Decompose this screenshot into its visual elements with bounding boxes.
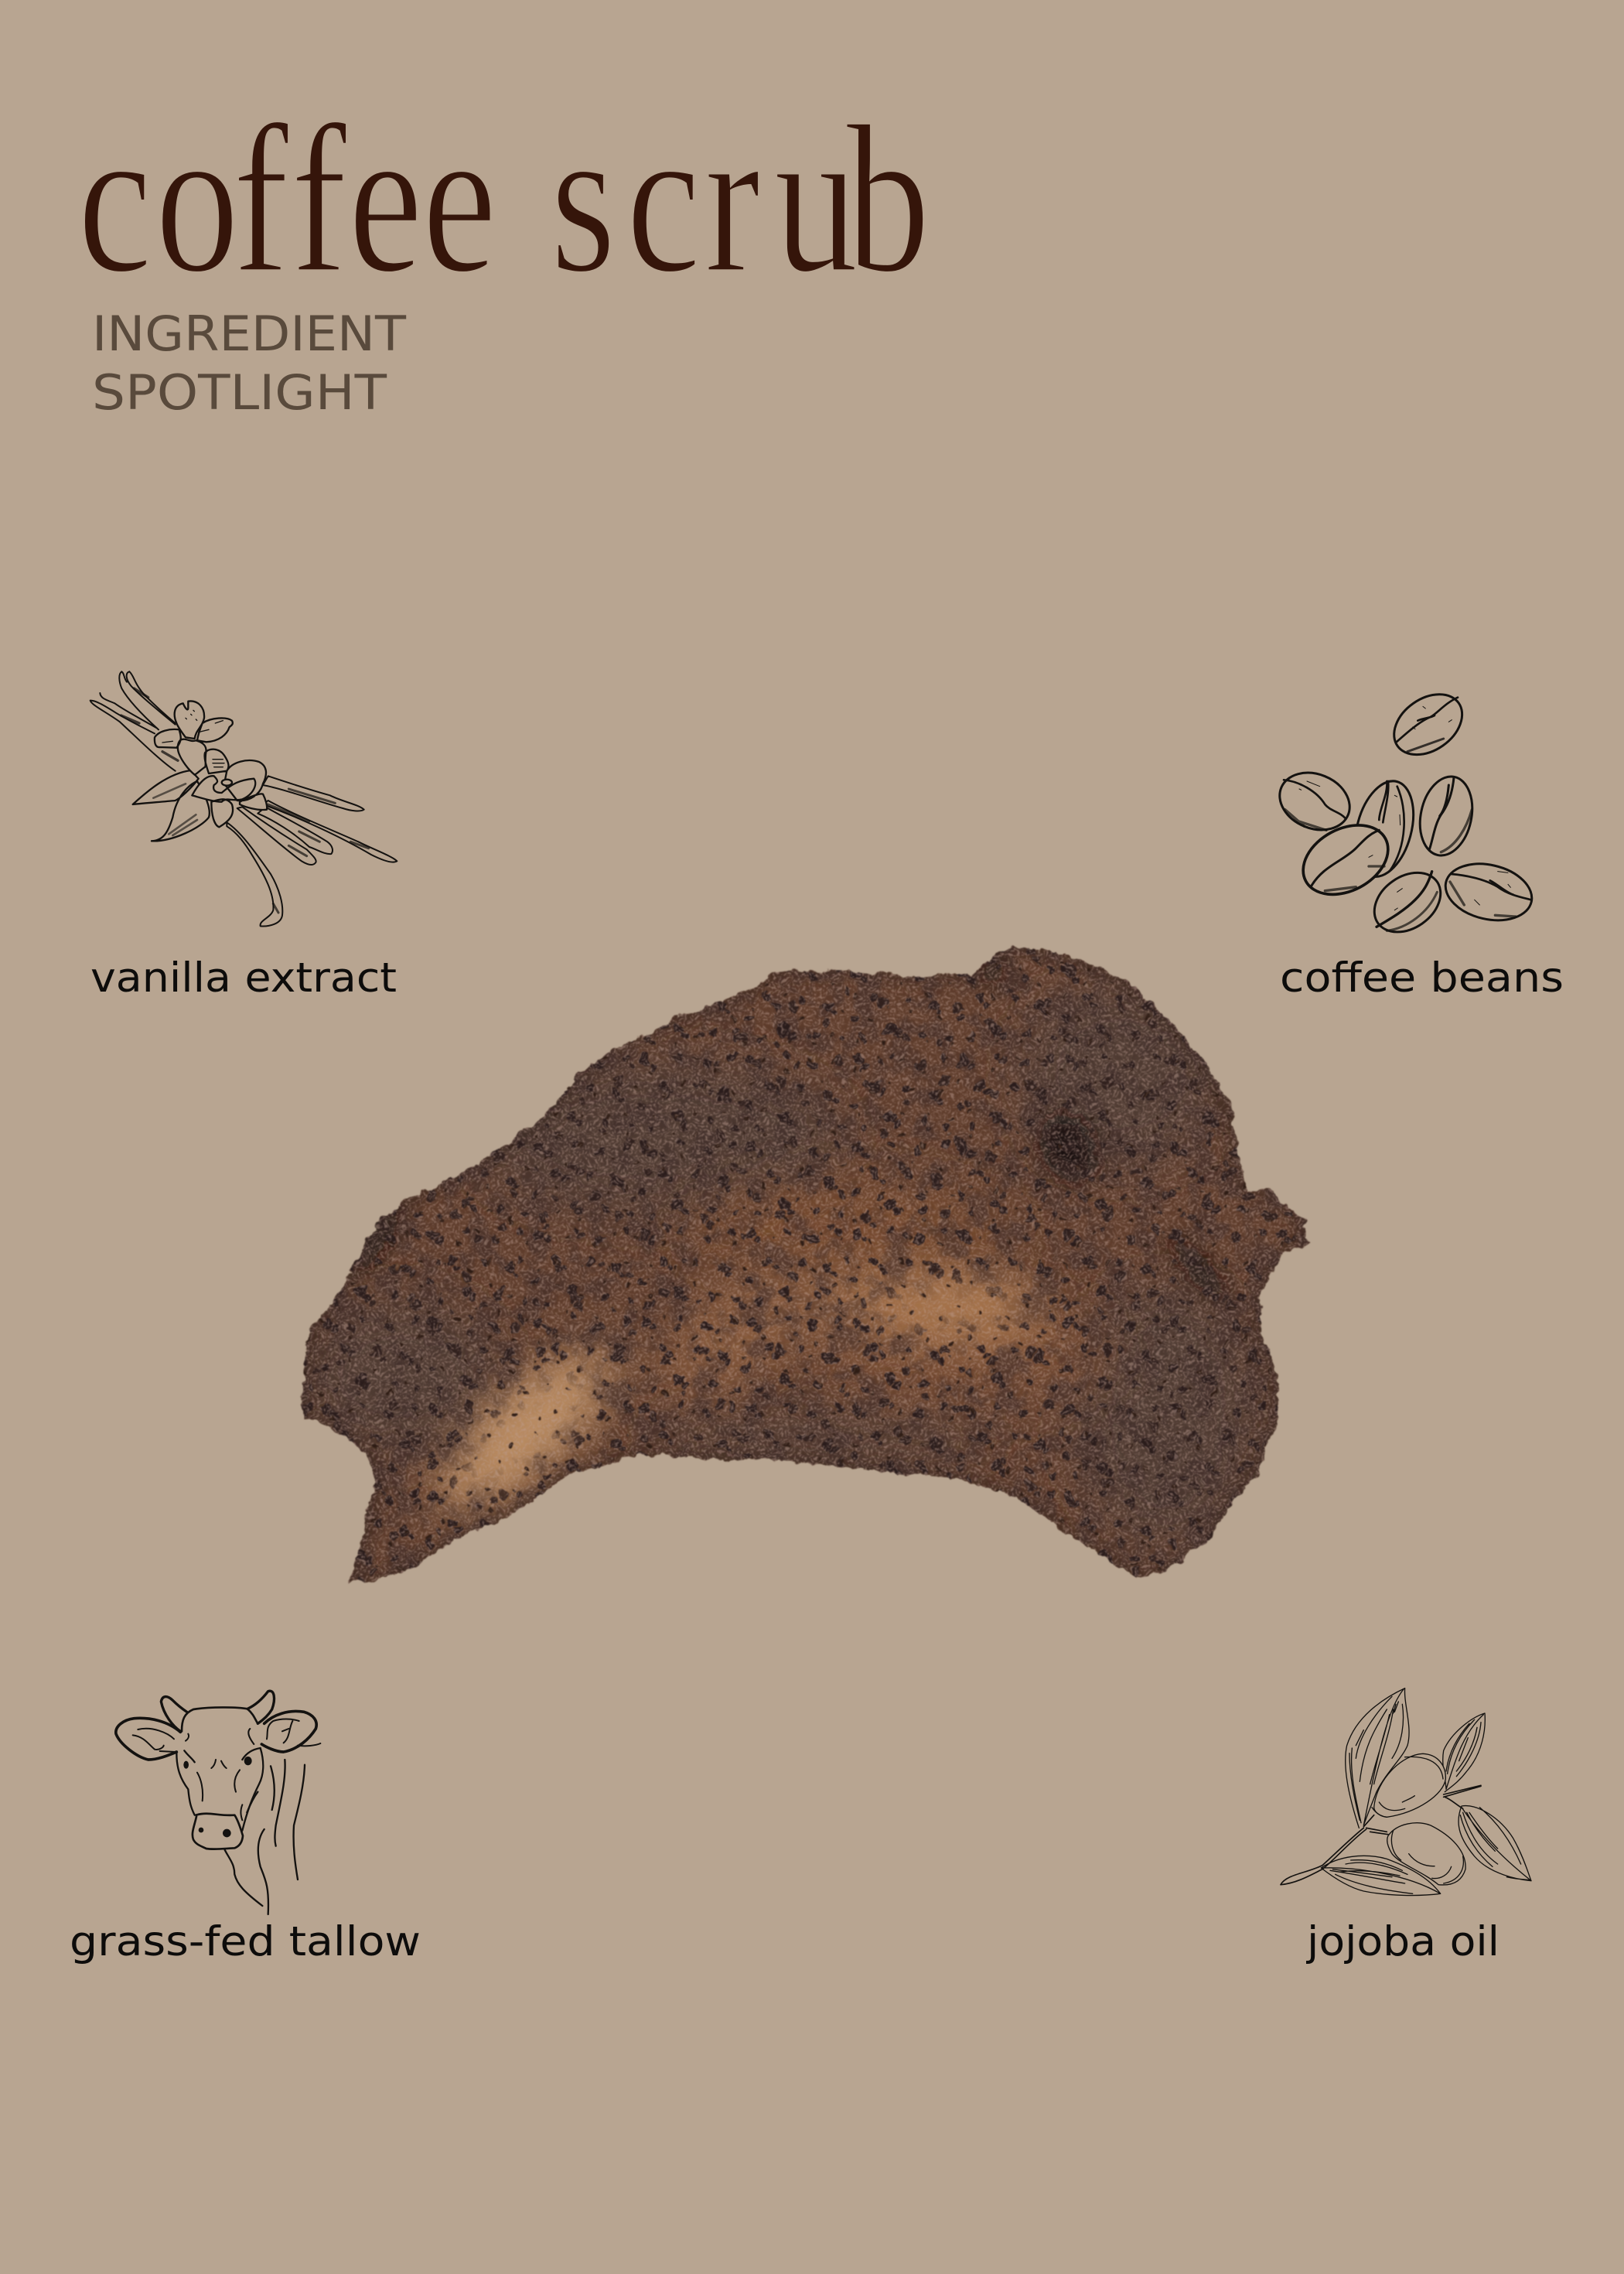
dark rim — [302, 947, 1312, 1583]
subtitle — [92, 306, 407, 421]
grey-brown coffee-rich areas — [302, 982, 1261, 1547]
icon: coffee beans — [1271, 682, 1537, 944]
label: vanilla extract: vanilla extract — [90, 954, 397, 1002]
label: coffee beans: coffee beans — [1280, 954, 1564, 1002]
coarse coffee ground dots — [278, 928, 1330, 1593]
title: coffee scrub — [77, 81, 930, 317]
icon: vanilla pods and flowers — [90, 671, 397, 926]
photo: coffee scrub swatch — [278, 928, 1330, 1593]
mottled dark layer — [320, 956, 1276, 1568]
subtitle: INGREDIENT — [92, 306, 407, 362]
label: jojoba oil: jojoba oil — [1306, 1918, 1499, 1965]
warm mid-tone band — [688, 1183, 1114, 1408]
dark crease marks — [350, 961, 1235, 1307]
small coffee ground dots — [303, 961, 1305, 1570]
caramel patches — [414, 1244, 1054, 1538]
subtitle: SPOTLIGHT — [92, 364, 387, 421]
fine highlight grain — [278, 928, 1330, 1593]
icon: jojoba branch — [1281, 1688, 1531, 1896]
icon: cow head — [116, 1691, 320, 1914]
label: grass-fed tallow: grass-fed tallow — [70, 1918, 421, 1965]
